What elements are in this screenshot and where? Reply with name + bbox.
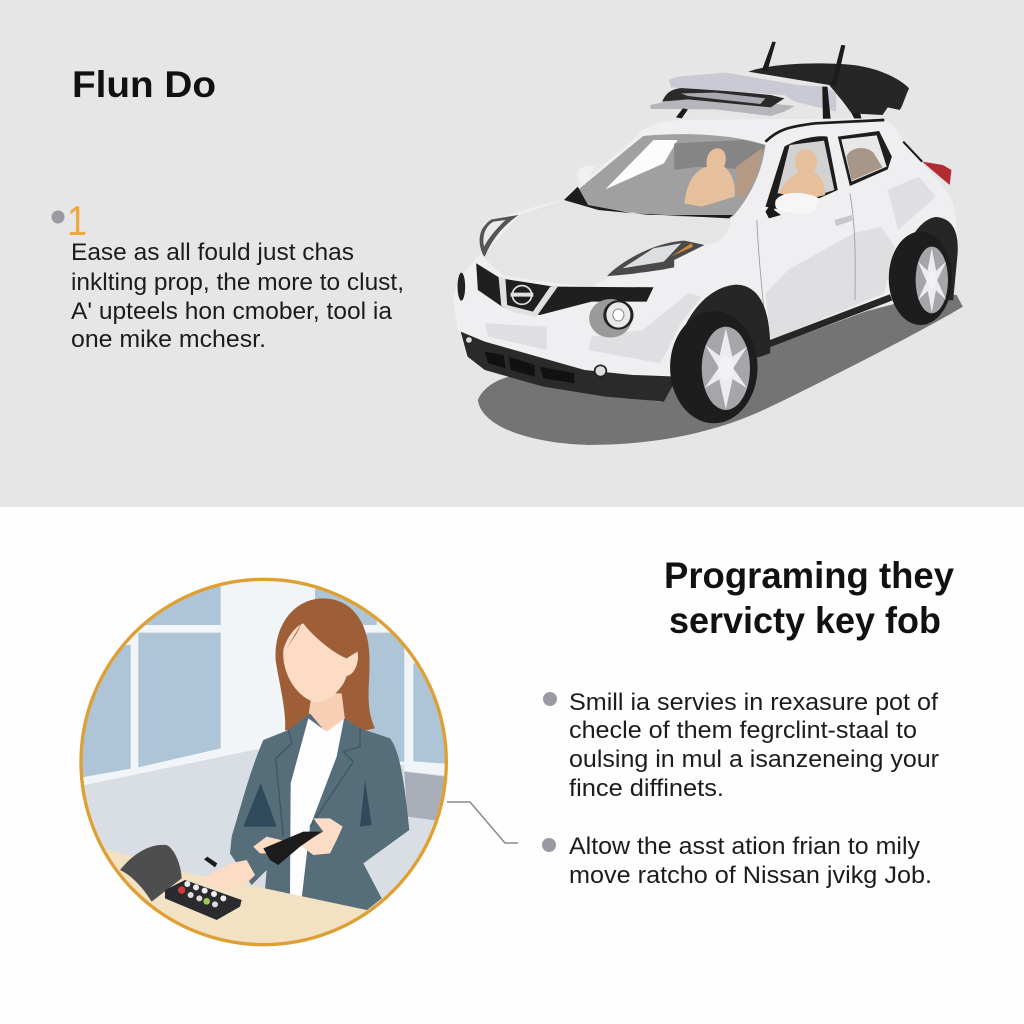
door handle [834, 215, 853, 226]
bangs [287, 624, 347, 658]
round headlamp [589, 299, 634, 338]
rear wheel [889, 232, 952, 325]
text block: step one description: Ease as all fould just chas [71, 239, 354, 266]
illustration: car [453, 42, 963, 445]
sill and wheel arches [676, 221, 954, 380]
front headlight left [480, 215, 519, 257]
front wheel [670, 311, 758, 423]
office background [84, 581, 444, 785]
cabinet [404, 772, 445, 822]
hair [275, 598, 375, 737]
tail light [922, 162, 951, 185]
text block: step one description: A' upteels hon cmober, tool ia [71, 298, 393, 325]
bullet two [542, 838, 556, 852]
door seams [757, 193, 855, 340]
panel: top grey section [0, 0, 1024, 507]
text block: bullet one: checle of them fegrclint-staal to [569, 717, 917, 744]
gold circle border [81, 579, 446, 945]
side shading [485, 177, 936, 363]
text block: bullet two [569, 833, 932, 889]
hand on keypad [200, 860, 255, 890]
keypad [165, 880, 242, 920]
scanner device [120, 845, 182, 902]
shirt [290, 718, 344, 898]
text block: bullet one: Smill ia servies in rexasure pot of [569, 689, 938, 716]
step one marker: 1 [67, 197, 87, 244]
heading: key fob: servicty key fob [669, 600, 941, 641]
grille [476, 263, 654, 317]
text block: step one description [71, 239, 404, 353]
lower bumper and intake [461, 332, 678, 402]
front headlight right [607, 241, 704, 276]
jacket [230, 713, 409, 912]
step one marker [52, 197, 87, 244]
text block: bullet one: fince diffinets. [569, 775, 724, 802]
face [283, 623, 358, 702]
text block: bullet one: oulsing in mul a isanzeneing your [569, 746, 939, 773]
lower wall [84, 750, 444, 910]
text block: step one description: one mike mchesr. [71, 326, 266, 353]
neck [308, 693, 345, 733]
heading: key fob: Programing they [664, 555, 954, 596]
text block: bullet two: Altow the asst ation frian to mily [569, 833, 920, 860]
text block: bullet one [569, 689, 939, 802]
connector line [447, 802, 518, 843]
wing mirrors [577, 166, 819, 218]
windows [77, 577, 450, 778]
desk [106, 850, 368, 943]
key fob held in hands [253, 818, 343, 865]
text block: bullet two: move ratcho of Nissan jvikg Job. [569, 862, 932, 889]
stylus [204, 857, 217, 867]
title: Flun Do [72, 64, 216, 105]
text block: step one description: inklting prop, the more to clust, [71, 269, 404, 296]
lapels and sleeve folds [243, 728, 372, 837]
car body [453, 118, 957, 402]
heading: key fob [664, 555, 954, 641]
bullet one [543, 692, 557, 706]
rear pillar edge [903, 142, 922, 162]
panel: bottom white section [0, 507, 1024, 1024]
windshield [564, 134, 765, 218]
roof cargo box [650, 42, 909, 122]
side windows [765, 131, 892, 210]
car shadow [478, 293, 963, 445]
left fog light [458, 273, 465, 301]
hood [483, 200, 731, 287]
roof line [765, 120, 884, 142]
illustration: woman programming key fob [70, 570, 457, 957]
